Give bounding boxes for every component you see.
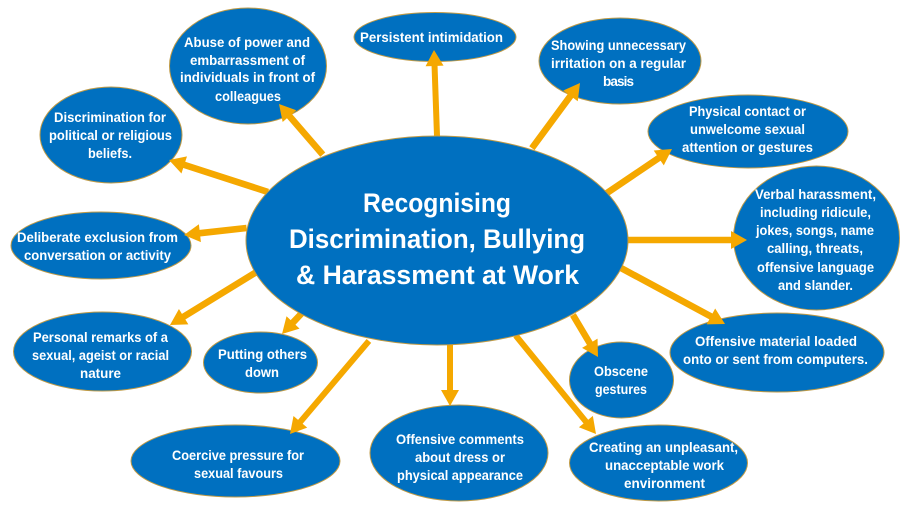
bubble: offensive material — [670, 313, 884, 392]
bubble: abuse of power: embarrassment of — [190, 53, 305, 68]
bubble: deliberate exclusion — [11, 212, 191, 279]
bubble: physical contact — [648, 95, 848, 168]
arrow: to coercive pressure — [283, 335, 376, 440]
bubble: deliberate exclusion: Deliberate exclusion from — [17, 230, 178, 245]
bubble: unnecessary irritation — [539, 18, 701, 104]
arrow: to offensive material — [617, 260, 729, 332]
bubble: physical contact: attention or gestures — [682, 140, 813, 155]
arrow: to unnecessary irritation — [525, 78, 587, 154]
central bubble: title: Discrimination, Bullying — [289, 224, 585, 254]
bubble: abuse of power: individuals in front of — [180, 70, 315, 85]
arrow: to offensive comments — [441, 344, 459, 406]
bubble: physical contact: unwelcome sexual — [690, 122, 805, 137]
bubble: political or religious discrimination: Discrimination for — [54, 110, 167, 125]
bubble: unpleasant environment — [570, 425, 748, 501]
bubble: offensive material: onto or sent from computers. — [683, 352, 868, 367]
bubble: unpleasant environment: environment — [624, 476, 706, 491]
bubble: unpleasant environment: Creating an unpleasant, — [589, 440, 738, 455]
bubble: verbal harassment: jokes, songs, name — [755, 223, 874, 238]
bubble: coercive pressure: sexual favours — [194, 466, 283, 481]
bubble: offensive comments: physical appearance — [397, 468, 523, 483]
bubble: offensive comments: Offensive comments — [396, 432, 524, 447]
bubble: abuse of power — [170, 8, 326, 124]
bubble: political or religious discrimination — [40, 87, 182, 183]
bubble: persistent intimidation — [354, 12, 516, 62]
bubble: coercive pressure: Coercive pressure for — [172, 448, 305, 463]
bubble: unnecessary irritation: irritation on a regular — [551, 56, 687, 71]
bubble: verbal harassment — [734, 166, 900, 310]
bubble: political or religious discrimination: beliefs. — [88, 146, 132, 161]
bubble: persistent intimidation: Persistent intimidation — [360, 30, 503, 45]
bubble: offensive material: Offensive material loaded — [695, 334, 857, 349]
bubble: political or religious discrimination: political or religious — [49, 128, 172, 143]
bubble: deliberate exclusion: conversation or activity — [24, 248, 171, 263]
arrow: to obscene gestures — [565, 310, 606, 362]
bubble: putting others down — [204, 332, 318, 393]
bubble: verbal harassment: offensive language — [757, 260, 874, 275]
bubble: verbal harassment: Verbal harassment, — [755, 187, 876, 202]
arrow: to verbal harassment — [627, 231, 747, 249]
bubble: personal remarks: Personal remarks of a — [33, 330, 168, 345]
bubble: personal remarks: nature — [80, 366, 121, 381]
bubble: verbal harassment: calling, threats, — [767, 241, 863, 256]
bubble: obscene gestures: gestures — [595, 382, 647, 397]
bubble: putting others down: Putting others — [218, 347, 307, 362]
bubble: offensive comments — [370, 405, 548, 501]
arrow: to political discrimination — [166, 151, 271, 201]
bubble: offensive comments: about dress or — [415, 450, 506, 465]
bubble: unnecessary irritation: Showing unnecessary — [551, 38, 686, 53]
bubble: unpleasant environment: unacceptable work — [605, 458, 724, 473]
bubble: obscene gestures — [570, 342, 674, 418]
arrow: to personal remarks — [165, 265, 260, 333]
arrow: to deliberate exclusion — [183, 219, 248, 244]
bubble: personal remarks: sexual, ageist or racial — [32, 348, 169, 363]
central bubble: title: Recognising — [363, 188, 511, 218]
bubble: verbal harassment: including ridicule, — [760, 205, 871, 220]
bubble: obscene gestures: Obscene — [594, 364, 648, 379]
central bubble: title — [246, 136, 628, 345]
bubble: physical contact: Physical contact or — [689, 104, 807, 119]
bubble: coercive pressure — [131, 425, 340, 497]
arrow: to abuse of power — [272, 98, 330, 161]
bubble: unnecessary irritation: basis — [603, 74, 634, 89]
central bubble: title: & Harassment at Work — [296, 260, 580, 290]
arrow: to persistent intimidation — [425, 50, 446, 137]
bubble: abuse of power: Abuse of power and — [184, 35, 310, 50]
bubble: putting others down: down — [245, 365, 279, 380]
arrow: to unpleasant environment — [509, 330, 603, 440]
bubble: abuse of power: colleagues — [215, 89, 281, 104]
arrow: to putting others down — [275, 306, 309, 340]
arrow: to physical contact — [602, 142, 677, 201]
bubble: personal remarks — [14, 312, 192, 391]
bubble: verbal harassment: and slander. — [778, 278, 853, 293]
